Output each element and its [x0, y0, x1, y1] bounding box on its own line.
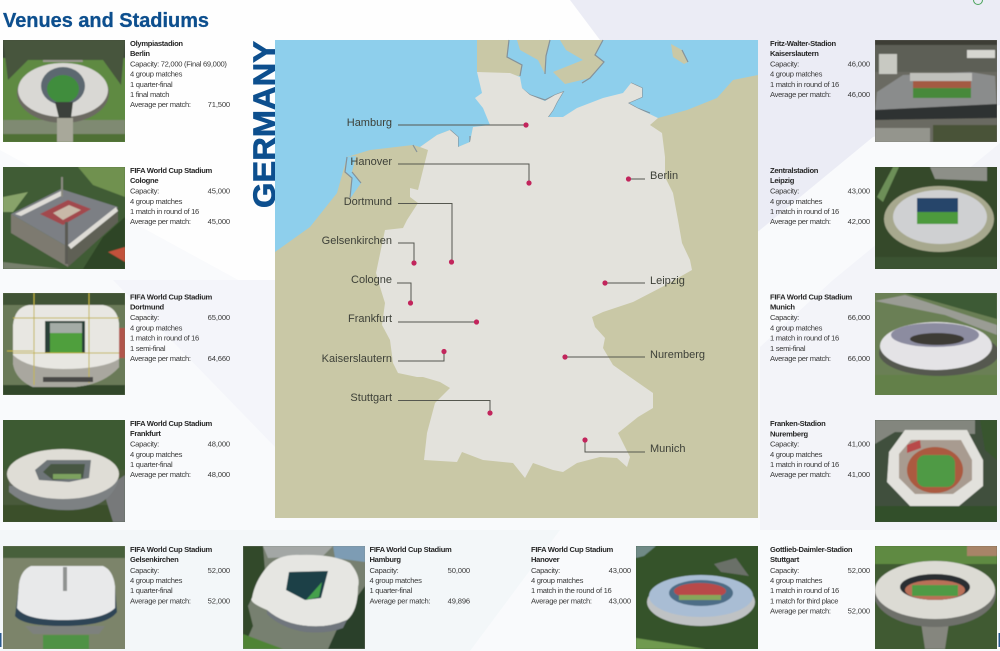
venue: Stuttgart: 1 match for third place [770, 596, 838, 606]
venue: Dortmund: 1 semi-final [130, 344, 166, 353]
city marker: Gelsenkirchen [322, 235, 417, 266]
venue: Dortmund: 64,660 [208, 354, 230, 363]
venue: Gelsenkirchen: 52,000 [208, 566, 230, 575]
venue: Gelsenkirchen: 1 quarter-final [130, 586, 173, 595]
venue: Frankfurt: 48,000 [208, 470, 230, 479]
venue: Hamburg: 49,896 [448, 596, 470, 606]
city marker: Frankfurt [348, 313, 479, 325]
venue: Munich: FIFA World Cup Stadium [770, 292, 853, 302]
venue: Nuremberg: Average per match: [770, 470, 831, 479]
venue: Hamburg [241, 544, 470, 651]
venue: Dortmund: Capacity: [130, 313, 159, 322]
venue: Munich: Capacity: [770, 313, 799, 322]
map of Germany [275, 40, 758, 518]
venue: Leipzig: Leipzig [770, 176, 795, 185]
venue: Dortmund: Average per match: [130, 354, 191, 363]
venue: Munich: 4 group matches [770, 324, 823, 332]
venue: Dortmund: 65,000 [208, 313, 230, 322]
venue: Leipzig: 4 group matches [770, 197, 823, 206]
city marker: Nuremberg: Nuremberg [650, 349, 705, 361]
city marker: Munich: Munich [650, 443, 685, 455]
city marker: Hanover [350, 156, 532, 186]
venue: Cologne [1, 165, 230, 271]
venue: Dortmund: 4 group matches [130, 324, 183, 332]
venue: Leipzig: Zentralstadion [770, 166, 819, 175]
venue: Gelsenkirchen: 4 group matches [130, 576, 183, 585]
city marker: Leipzig [602, 275, 685, 287]
city marker: Berlin [626, 170, 678, 182]
venue: Berlin: Olympiastadion [130, 39, 183, 48]
city marker: Leipzig: Leipzig [650, 275, 685, 287]
venue: Hamburg: Capacity: [370, 566, 399, 575]
venue: Cologne: Average per match: [130, 217, 191, 226]
city marker: Dortmund: Dortmund [344, 196, 392, 208]
venue: Nuremberg: 1 match in round of 16 [770, 460, 839, 469]
photo: Olympiastadion [3, 40, 125, 142]
venue: Gelsenkirchen: 52,000 [208, 596, 230, 606]
city marker: Munich [582, 437, 685, 455]
venue: Dortmund: FIFA World Cup Stadium [130, 292, 213, 302]
venue: Stuttgart: Stuttgart [770, 555, 800, 564]
venue: Berlin: Average per match: [130, 100, 191, 109]
city marker: Kaiserslautern [322, 349, 447, 365]
venue: Hanover: Hanover [531, 555, 560, 564]
Dutch inland water [345, 156, 361, 198]
venue: Leipzig [770, 165, 999, 271]
photo: Dortmund stadium [3, 293, 125, 395]
venue: Cologne: 4 group matches [130, 197, 183, 206]
venue: Kaiserslautern: 4 group matches [770, 70, 823, 79]
city marker: Frankfurt: Frankfurt [348, 313, 392, 325]
venue: Munich: Average per match: [770, 354, 831, 363]
venue: Frankfurt: Capacity: [130, 440, 159, 448]
city marker: Kaiserslautern: Kaiserslautern [322, 353, 392, 365]
venue: Hamburg: Average per match: [370, 596, 430, 606]
venue: Frankfurt: 1 quarter-final [130, 460, 173, 469]
venue: Nuremberg: Franken-Stadion [770, 419, 826, 428]
venue: Hanover: 43,000 [609, 566, 631, 575]
venue: Dortmund: 1 match in round of 16 [130, 334, 199, 342]
photo: Franken-Stadion [875, 420, 997, 522]
venue: Hanover [531, 544, 760, 651]
Germany land [376, 72, 692, 478]
venue: Leipzig: Average per match: [770, 217, 831, 226]
photo: Munich stadium [875, 293, 997, 395]
venue: Nuremberg: Capacity: [770, 440, 799, 448]
venue: Kaiserslautern: 46,000 [848, 60, 870, 68]
venue: Hanover: 43,000 [609, 596, 631, 606]
venue: Stuttgart: 1 match in round of 16 [770, 586, 839, 595]
venue: Kaiserslautern: Capacity: [770, 60, 799, 68]
photo: Hanover stadium [636, 546, 758, 649]
venue: Berlin: Capacity: 72,000 (Final 69,000) [130, 60, 227, 68]
venue: Hanover: 4 group matches [531, 576, 584, 585]
venue: Frankfurt [1, 418, 230, 524]
venue: Frankfurt: FIFA World Cup Stadium [130, 419, 213, 428]
venue: Leipzig: 43,000 [848, 186, 870, 196]
venue: Cologne: 45,000 [208, 217, 230, 226]
venue: Nuremberg: 4 group matches [770, 450, 823, 459]
venue: Gelsenkirchen [1, 544, 230, 651]
city marker: Hamburg: Hamburg [347, 117, 392, 129]
venue: Hamburg: Hamburg [370, 555, 401, 564]
venue: Munich [770, 291, 999, 397]
venue: Leipzig: Capacity: [770, 186, 799, 196]
venue: Berlin: 1 final match [130, 90, 169, 99]
venue: Frankfurt: 4 group matches [130, 450, 183, 459]
venue: Stuttgart: Capacity: [770, 566, 799, 575]
photo: Gelsenkirchen stadium [3, 546, 125, 649]
venue: Cologne: FIFA World Cup Stadium [130, 166, 213, 175]
venue: Stuttgart: Gottlieb-Daimler-Stadion [770, 545, 853, 554]
vertical heading: Germany: GERMANY [246, 41, 282, 208]
photo: Kaiserslautern stadium [875, 40, 997, 142]
city marker: Stuttgart [350, 392, 493, 416]
venue: Gelsenkirchen: Average per match: [130, 596, 191, 606]
venue: Kaiserslautern: Average per match: [770, 90, 831, 99]
venue: Hamburg: FIFA World Cup Stadium [370, 545, 452, 554]
city marker: Hanover: Hanover [350, 156, 392, 168]
venue: Cologne: Capacity: [130, 186, 159, 196]
city marker: Nuremberg [562, 349, 705, 361]
venue: Stuttgart: 52,000 [848, 606, 870, 616]
venue: Berlin [1, 38, 230, 144]
venue: Berlin: 71,500 [208, 100, 230, 109]
city marker: Cologne: Cologne [351, 274, 392, 286]
venue: Hamburg: 1 quarter-final [370, 586, 412, 595]
venue: Berlin: 4 group matches [130, 70, 183, 79]
venue: Munich: 1 semi-final [770, 344, 806, 353]
venue: Hanover: 1 match in the round of 16 [531, 586, 612, 595]
city marker: Stuttgart: Stuttgart [350, 392, 392, 404]
venue: Nuremberg [770, 418, 999, 524]
venue: Kaiserslautern: 1 match in round of 16 [770, 80, 839, 89]
venue: Munich: Munich [770, 302, 795, 312]
photo: Leipzig stadium [875, 167, 997, 269]
venue: Hanover: Average per match: [531, 596, 592, 606]
venue: Dortmund [1, 291, 230, 397]
venue: Hamburg: 4 group matches [370, 576, 422, 585]
venue: Kaiserslautern: Fritz-Walter-Stadion [770, 39, 837, 48]
venue: Leipzig: 42,000 [848, 217, 870, 226]
city marker: Hamburg [347, 117, 529, 129]
venue: Dortmund: Dortmund [130, 302, 165, 312]
sea [275, 40, 758, 252]
venue: Leipzig: 1 match in round of 16 [770, 207, 839, 216]
venue: Nuremberg: Nuremberg [770, 430, 808, 438]
city marker: Berlin: Berlin [650, 170, 678, 182]
city marker: Dortmund [344, 196, 454, 265]
venue: Stuttgart: 4 group matches [770, 576, 823, 585]
venue: Gelsenkirchen: Gelsenkirchen [130, 555, 179, 564]
venue: Frankfurt: Frankfurt [130, 429, 161, 438]
city marker: Gelsenkirchen: Gelsenkirchen [322, 235, 392, 247]
venue: Frankfurt: Average per match: [130, 470, 191, 479]
photo: Frankfurt stadium [3, 420, 125, 522]
venue: Munich: 66,000 [848, 313, 870, 322]
venue: Berlin: 1 quarter-final [130, 80, 173, 89]
venue: Hamburg: 50,000 [448, 566, 470, 575]
venue: Hanover: FIFA World Cup Stadium [531, 545, 614, 554]
photo: Hamburg stadium [243, 546, 365, 649]
venue: Cologne: Cologne [130, 176, 158, 185]
venue: Cologne: 45,000 [208, 186, 230, 196]
venue: Nuremberg: 41,000 [848, 440, 870, 448]
icon: green emblem [974, 0, 982, 4]
venue: Munich: 66,000 [848, 354, 870, 363]
venue: Kaiserslautern: 46,000 [848, 90, 870, 99]
venue: Stuttgart [770, 544, 999, 651]
venue: Kaiserslautern: Kaiserslautern [770, 49, 819, 58]
venue: Kaiserslautern [770, 38, 999, 144]
venue: Gelsenkirchen: Capacity: [130, 566, 159, 575]
photo: Stuttgart stadium [875, 546, 997, 649]
venue: Berlin: Berlin [130, 49, 150, 58]
photo: Cologne stadium [3, 167, 125, 269]
venue: Stuttgart: 52,000 [848, 566, 870, 575]
venue: Cologne: 1 match in round of 16 [130, 207, 199, 216]
city marker: Cologne [351, 274, 413, 306]
title: Venues and Stadiums [3, 10, 209, 32]
venue: Gelsenkirchen: FIFA World Cup Stadium [130, 545, 213, 554]
Danish land and islands [477, 40, 688, 84]
venue: Frankfurt: 48,000 [208, 440, 230, 448]
venue: Stuttgart: Average per match: [770, 606, 831, 616]
venue: Nuremberg: 41,000 [848, 470, 870, 479]
venue: Munich: 1 match in round of 16 [770, 334, 839, 342]
venue: Hanover: Capacity: [531, 566, 560, 575]
